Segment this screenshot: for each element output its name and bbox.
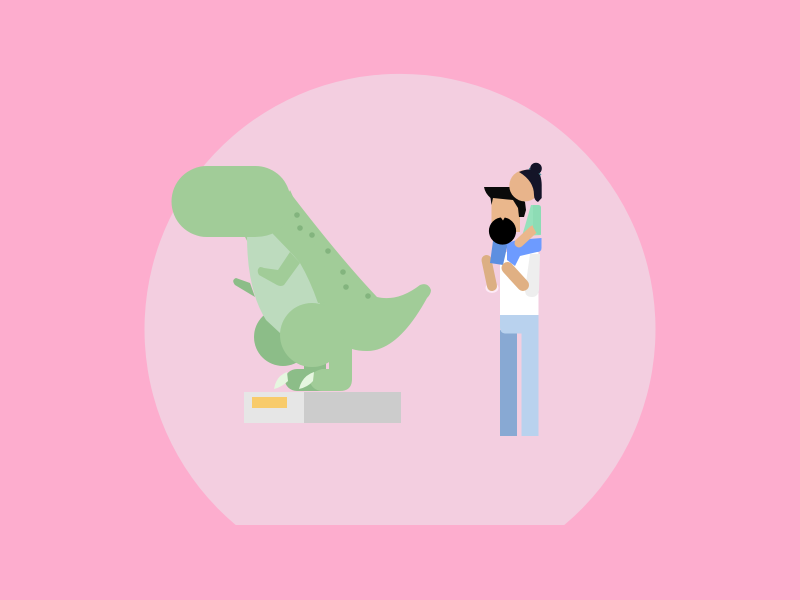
neck fill [272, 190, 340, 303]
father hair [484, 187, 526, 217]
child hair bun [530, 163, 542, 174]
plaque [252, 397, 287, 408]
belly [247, 233, 320, 333]
far leg [254, 308, 326, 391]
thigh [280, 303, 344, 367]
father front leg [522, 330, 538, 436]
father shirt [500, 252, 538, 315]
child near leg [508, 268, 523, 285]
child hair band [529, 168, 541, 175]
father carrying child [484, 163, 542, 436]
near claw [299, 372, 314, 389]
dinosaur statue [172, 166, 431, 391]
far arm [233, 278, 255, 297]
back spots [294, 212, 371, 299]
near arm [258, 252, 300, 286]
child hair [519, 170, 542, 202]
child shorts [507, 238, 542, 266]
father beard [489, 217, 516, 245]
body and tail [245, 190, 431, 391]
father near sleeve [525, 254, 540, 297]
child back leg blue [490, 241, 508, 265]
child arm [519, 230, 533, 243]
panel: pale circular backdrop [145, 74, 656, 525]
pedestal [244, 392, 401, 423]
father hips [500, 315, 538, 334]
father far arm [486, 260, 492, 286]
far claw [274, 372, 288, 389]
father hand sleeve [486, 283, 498, 293]
child sleeve [533, 205, 541, 235]
child head [509, 170, 541, 201]
father face [492, 198, 520, 232]
father back leg [500, 330, 517, 436]
beard notch [500, 217, 505, 220]
head [172, 166, 290, 237]
child torso [522, 205, 541, 236]
